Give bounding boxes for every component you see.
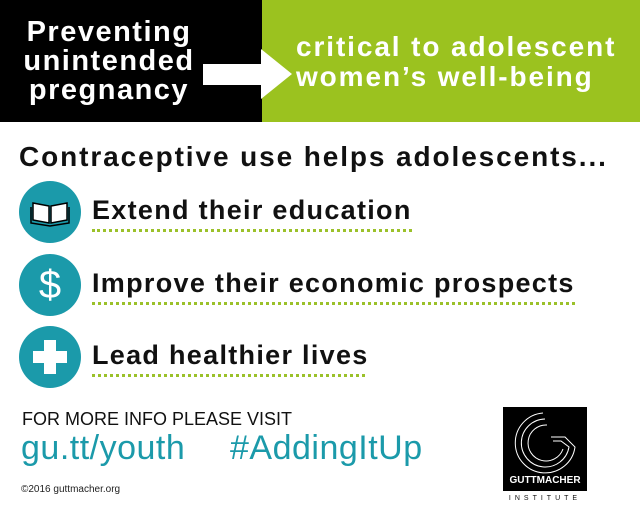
item: health — [19, 326, 369, 388]
text: extend their education: Extend their education — [92, 195, 412, 225]
logo: guttmacher — [503, 407, 587, 502]
icon: book — [19, 181, 81, 243]
arrow — [203, 49, 292, 99]
link: hashtag: #AddingItUp — [230, 429, 423, 467]
text: lead healthier lives: Lead healthier lives — [92, 340, 369, 370]
link: youth: gu.tt/youth — [21, 429, 185, 467]
icon: dollar: $ — [39, 263, 61, 307]
panel: black header — [0, 0, 262, 122]
heading: critical to adolescent women's well-being — [296, 31, 616, 92]
icon: dollar — [19, 254, 81, 316]
heading: critical to adolescent women's well-being: women’s well-being — [296, 61, 594, 92]
item: economic — [19, 254, 575, 316]
subheading: Contraceptive use helps adolescents... — [19, 141, 608, 172]
logo: guttmacher: INSTITUTE — [509, 495, 581, 502]
footer text: FOR MORE INFO PLEASE VISIT — [22, 409, 292, 429]
logo: guttmacher: GUTTMACHER — [509, 475, 581, 486]
icon: plus — [19, 326, 81, 388]
panel: green header — [262, 0, 640, 122]
item: education — [19, 181, 412, 243]
heading: preventing unintended pregnancy: Preventing unintended pregnancy — [23, 16, 195, 106]
copyright: ©2016 guttmacher.org — [21, 484, 120, 495]
heading: critical to adolescent women's well-being: critical to adolescent — [296, 31, 616, 62]
text: improve economic prospects: Improve their economic prospects — [92, 268, 575, 298]
